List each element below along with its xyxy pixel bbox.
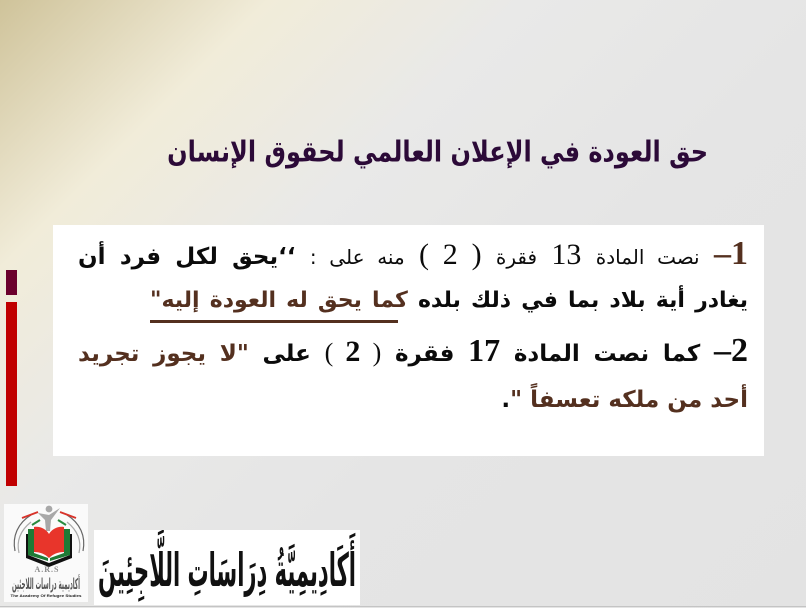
bottom edge line	[0, 606, 806, 607]
decorative bar: maroon	[6, 270, 17, 295]
ARS label: A.R.S	[34, 565, 60, 574]
panel: article text	[53, 225, 764, 456]
text line 1: 1– نصت المادة 13 فقرة ( 2 ) منه على : ‘‘يحق لكل فرد أن	[78, 235, 748, 272]
text line 2: يغادر أية بلاد بما في ذلك بلده كما يحق له العودة إليه"	[150, 288, 748, 313]
text line 4: أحد من ملكه تعسفاً ".	[501, 387, 748, 413]
book	[28, 529, 48, 561]
arcs	[14, 515, 84, 553]
decorative bar: red	[6, 302, 17, 486]
title: حق العودة في الإعلان العالمي لحقوق الإنسان	[167, 135, 708, 169]
underline	[150, 320, 398, 323]
text line 3: 2– كما نصت المادة 17 فقرة ( 2 ) على "لا يجوز تجريد	[78, 332, 748, 369]
figure	[46, 506, 52, 512]
logo: academy emblem	[4, 504, 88, 602]
english name: The Academy Of Refugee Studies	[10, 593, 82, 598]
